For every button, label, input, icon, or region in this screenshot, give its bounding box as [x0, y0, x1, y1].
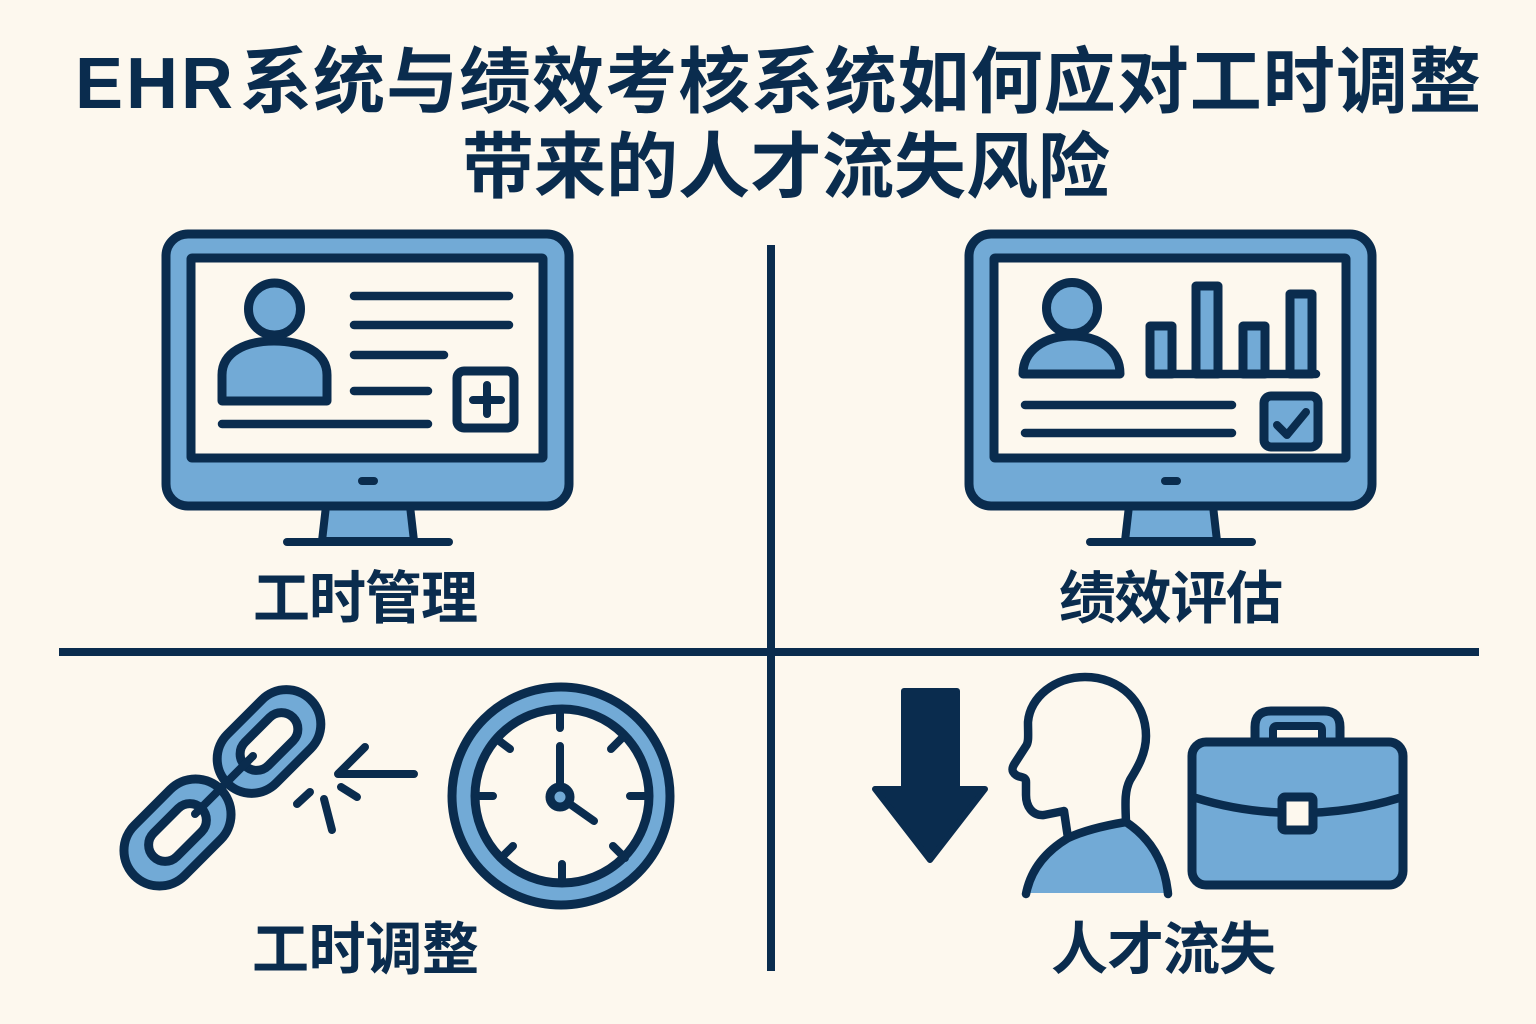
icon: person profile	[1012, 677, 1168, 894]
icon: monitor with performance chart	[969, 234, 1372, 542]
label: working hours adjustment: 工时调整	[252, 918, 479, 982]
title	[75, 43, 1481, 208]
title: 带来的人才流失风险	[462, 128, 1110, 208]
icon: arrow pointing to chain	[338, 747, 414, 774]
title: EHR	[75, 44, 233, 124]
icon: briefcase	[1192, 711, 1403, 885]
panel: working hours adjustment	[109, 675, 670, 982]
title: 系统与绩效考核系统如何应对工时调整	[240, 43, 1481, 123]
label: talent loss: 人才流失	[1051, 918, 1276, 982]
panel: talent loss	[875, 677, 1403, 982]
icon: clock	[452, 687, 670, 905]
icon: down arrow	[875, 691, 985, 860]
panel: time management	[166, 234, 569, 631]
icon: monitor with employee profile	[166, 234, 569, 542]
label: time management: 工时管理	[253, 567, 478, 631]
label: performance evaluation: 绩效评估	[1059, 567, 1283, 631]
panel: performance evaluation	[969, 234, 1372, 631]
icon: broken chain	[109, 675, 357, 901]
